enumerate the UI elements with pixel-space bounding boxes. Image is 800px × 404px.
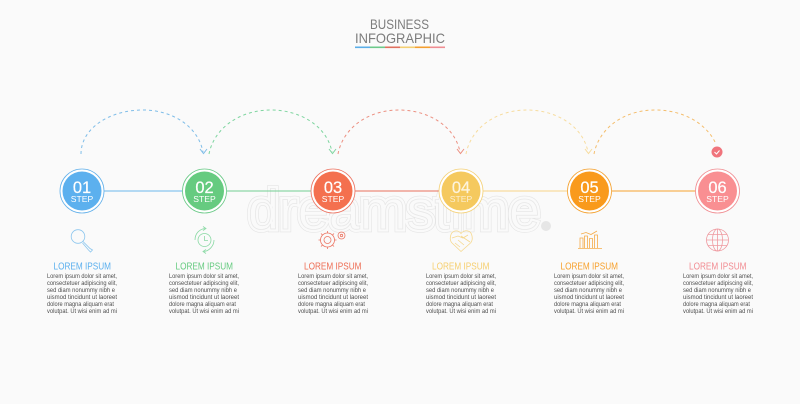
column 2 text [169,273,239,315]
step 03 circle: STEP [322,194,344,204]
arrow: 05 to 06 [594,110,716,154]
column 5 text: Lorem ipsum dolor sit amet, [554,273,624,280]
step 05 circle: STEP [578,194,601,204]
step 05 circle: 05 [580,179,599,197]
column 3 text [298,273,368,315]
arrow: 02 to 03 [209,110,336,154]
watermark: dreamstime [248,178,540,241]
icon: globe [706,229,728,251]
column 3 text: uismod tincidunt ut laoreet [298,294,368,301]
step 06 circle: 06 [708,179,727,197]
step 03 circle [311,169,355,213]
column 5 text [554,273,624,315]
step 01 circle [60,169,104,213]
column 5 text: uismod tincidunt ut laoreet [554,294,624,301]
column 2 text: uismod tincidunt ut laoreet [169,294,239,301]
column 3 text: volutpat. Ut wisi enim ad mi [298,308,368,315]
column 4 heading: LOREM IPSUM [432,262,490,272]
step 02 circle: STEP [193,194,216,204]
column 1 text: volutpat. Ut wisi enim ad mi [47,308,117,315]
step 04 circle [439,169,483,213]
column 3 text: consectetuer adipiscing elit, [298,280,368,287]
column 3 text: dolore magna aliquam erat [298,301,365,308]
column 1 text: sed diam nonummy nibh e [47,287,116,294]
column 3 text: Lorem ipsum dolor sit amet, [298,273,368,280]
column 3 text: sed diam nonummy nibh e [298,287,367,294]
title: BUSINESS [370,16,429,32]
column 4 text: sed diam nonummy nibh e [426,287,495,294]
icon: magnifier [71,230,92,252]
title [355,16,445,46]
column 6 text: Lorem ipsum dolor sit amet, [683,273,753,280]
arrow: 03 to 04 [338,110,464,154]
column 6 text: uismod tincidunt ut laoreet [683,294,753,301]
column 5 text: sed diam nonummy nibh e [554,287,623,294]
title rainbow underline [355,46,445,48]
arrow: 01 to 02 [81,110,207,154]
column 2 text: dolore magna aliquam erat [169,301,236,308]
icon: clock with arrows [195,226,214,254]
step 01 circle: 01 [73,179,91,197]
column 4 text: volutpat. Ut wisi enim ad mi [426,308,496,315]
icon: gears [318,231,345,249]
column 4 text [426,273,496,315]
step 01 circle: STEP [71,194,93,204]
column 6 text: volutpat. Ut wisi enim ad mi [683,308,753,315]
column 4 text: consectetuer adipiscing elit, [426,280,496,287]
step 06 circle [696,169,740,213]
column 5 text: consectetuer adipiscing elit, [554,280,624,287]
step 06 circle: STEP [706,194,729,204]
column 2 heading: LOREM IPSUM [176,262,233,272]
column 2 text: consectetuer adipiscing elit, [169,280,239,287]
step 02 circle [182,169,226,213]
column 2 text: Lorem ipsum dolor sit amet, [169,273,239,280]
column 6 text: consectetuer adipiscing elit, [683,280,753,287]
column 6 text: sed diam nonummy nibh e [683,287,752,294]
column 2 text: volutpat. Ut wisi enim ad mi [169,308,239,315]
column 1 text [47,273,117,315]
step 02 circle: 02 [195,179,214,197]
column 1 text: uismod tincidunt ut laoreet [47,294,117,301]
step 05 circle [568,169,612,213]
column 3 heading: LOREM IPSUM [304,262,362,272]
column 1 text: dolore magna aliquam erat [47,301,114,308]
column 1 text: consectetuer adipiscing elit, [47,280,117,287]
column 1 text: Lorem ipsum dolor sit amet, [47,273,117,280]
step 04 circle: 04 [452,179,470,197]
column 6 text [683,273,753,315]
step 03 circle: 03 [324,179,342,197]
step 04 circle: STEP [450,194,472,204]
column 5 text: dolore magna aliquam erat [554,301,621,308]
column 5 heading: LOREM IPSUM [560,262,618,272]
column 2 text: sed diam nonummy nibh e [169,287,238,294]
icon: handshake heart [450,231,472,252]
column 5 text: volutpat. Ut wisi enim ad mi [554,308,624,315]
column 4 text: uismod tincidunt ut laoreet [426,294,496,301]
title: INFOGRAPHIC [355,30,445,46]
column 1 heading: LOREM IPSUM [54,262,111,272]
column 6 text: dolore magna aliquam erat [683,301,750,308]
column 4 text: Lorem ipsum dolor sit amet, [426,273,496,280]
column 4 text: dolore magna aliquam erat [426,301,493,308]
arrow: 04 to 05 [466,110,592,154]
watermark: dreamstime [248,178,540,241]
icon: bar chart [578,231,602,248]
connector lines [104,190,696,192]
column 6 heading: LOREM IPSUM [689,262,746,272]
watermark: dreamstime [248,178,540,241]
icon: check badge [712,146,722,158]
